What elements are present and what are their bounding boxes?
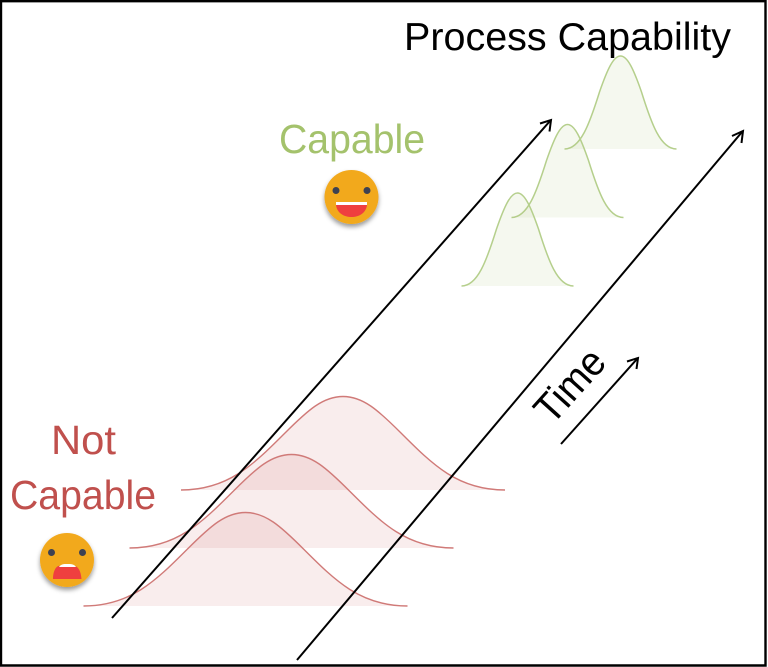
label: time: Time: [525, 339, 615, 432]
label: not capable: Capable: [10, 472, 156, 518]
group: capable distributions: [462, 56, 676, 286]
distribution: not capable, latest: [181, 396, 505, 490]
icon: happy face: [324, 170, 378, 224]
icon: scared face: [40, 533, 94, 587]
arrow: right time rail: [297, 131, 743, 660]
distribution: capable, earliest: [462, 193, 574, 286]
arrow: left time rail: [112, 120, 551, 618]
distribution: capable, middle: [512, 124, 624, 218]
label: capable: Capable: [279, 116, 425, 162]
arrow: time direction: [561, 358, 638, 444]
distribution: not capable, middle: [130, 454, 454, 548]
distribution: not capable, earliest: [84, 512, 408, 606]
group: not capable distributions: [84, 396, 505, 606]
label: not capable: Not: [51, 417, 117, 463]
title: Process Capability: [404, 16, 732, 59]
label: not capable: [10, 417, 156, 518]
distribution: capable, latest: [564, 56, 676, 149]
